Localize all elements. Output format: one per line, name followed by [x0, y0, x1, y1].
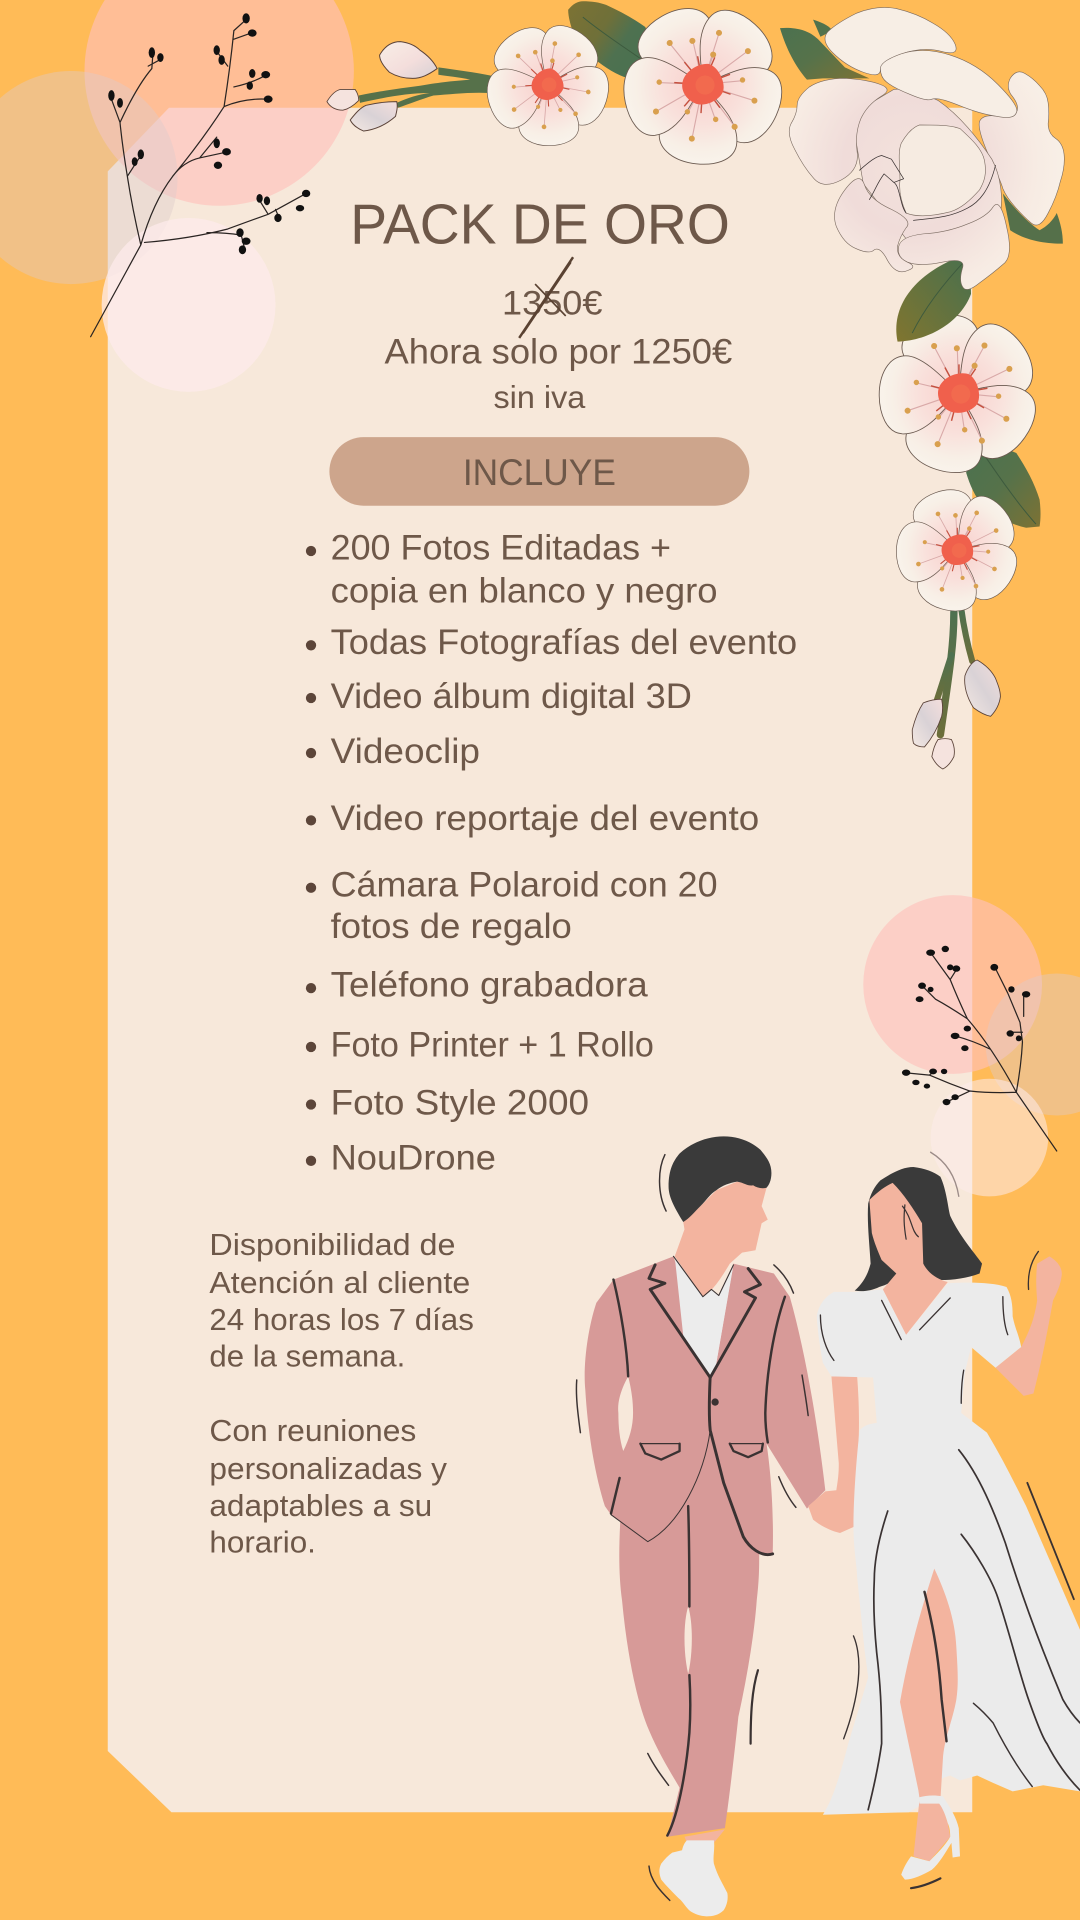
availability text block: de la semana.: [209, 1340, 405, 1374]
woman hair: [855, 1167, 982, 1291]
man jacket: [585, 1256, 825, 1555]
man suit lines: [576, 1155, 808, 1900]
availability text block: personalizadas y: [209, 1452, 448, 1486]
leaf right: [1003, 193, 1063, 244]
decorative circles bottom right: [863, 895, 1080, 1196]
illustration: couple: [576, 1136, 1080, 1916]
availability text block: Atención al cliente: [209, 1266, 470, 1300]
woman left arm and hand: [808, 1376, 859, 1533]
availability text block: horario.: [209, 1526, 316, 1560]
petal lower front: [898, 204, 1009, 289]
flowers and leaves right side: [850, 289, 1070, 769]
man face and neck: [675, 1182, 768, 1297]
petal right: [979, 72, 1064, 225]
item: camara polaroid: fotos de regalo: [331, 906, 572, 946]
item: videoclip: Videoclip: [331, 731, 480, 771]
includes pill heading: INCLUYE: [463, 452, 616, 493]
item: foto style: Foto Style 2000: [331, 1082, 589, 1122]
leaf upper left: [780, 20, 869, 80]
availability text block: adaptables a su: [209, 1489, 432, 1523]
peony flower with leaves: [780, 7, 1064, 342]
woman leg in slit: [900, 1569, 958, 1861]
item: camara polaroid: Cámara Polaroid con 20: [331, 864, 718, 904]
petal top back: [825, 7, 956, 75]
woman face and neck: [869, 1183, 948, 1335]
item: camara polaroid: [306, 864, 718, 946]
includes pill heading: [329, 437, 749, 506]
stems bottom: [937, 609, 972, 735]
bud right lower: [965, 660, 1000, 716]
bud small left: [327, 89, 359, 110]
bud left lower: [912, 699, 943, 747]
pocket gap: [618, 1376, 633, 1451]
man button: [711, 1398, 719, 1406]
flower two: [587, 0, 823, 205]
item: noudrone: NouDrone: [331, 1137, 496, 1177]
peony inner lines: [860, 156, 996, 220]
decorative circles top left: [0, 0, 354, 392]
bud lower: [350, 102, 397, 131]
man shoe: [659, 1840, 728, 1916]
gap between legs: [684, 1607, 692, 1674]
branch: bottom right twig: [902, 946, 1057, 1151]
flower three: [850, 289, 1070, 505]
man trousers: [619, 1420, 759, 1837]
item: 200 fotos: 200 Fotos Editadas +: [331, 528, 671, 568]
availability text block: 24 horas los 7 días: [209, 1303, 474, 1337]
item: video reportaje: Video reportaje del evento: [331, 798, 759, 838]
flower four: [873, 469, 1044, 636]
man shirt: [675, 1256, 733, 1376]
old price struck through: 1350€: [502, 285, 602, 323]
bud large top: [380, 42, 437, 78]
item: 200 fotos: copia en blanco y negro: [331, 570, 718, 610]
man ankle: [684, 1829, 725, 1843]
woman dress lines: [820, 1152, 1080, 1888]
petal center base: [855, 89, 1001, 239]
old price struck through: [502, 257, 602, 338]
stems top: [359, 67, 492, 108]
item: todas fotografias: Todas Fotografías del evento: [331, 622, 797, 662]
item: foto printer: Foto Printer + 1 Rollo: [331, 1025, 654, 1065]
man hair: [669, 1136, 771, 1222]
woman shoe: [901, 1796, 960, 1880]
bud tip: [932, 739, 954, 769]
leaf middle right: [966, 442, 1041, 528]
floral garland top: [327, 0, 823, 205]
item: video album: Video álbum digital 3D: [331, 676, 692, 716]
petal lower left: [835, 179, 913, 272]
flower one: [456, 0, 642, 179]
petal top long: [880, 50, 1017, 118]
item: 200 fotos: [306, 528, 718, 610]
new price: Ahora solo por 1250€: [384, 332, 733, 372]
tax note: sin iva: [493, 379, 586, 415]
leaf bottom: [896, 253, 971, 342]
woman right arm: [996, 1256, 1062, 1396]
petal left: [789, 78, 887, 184]
availability text block: [209, 1228, 474, 1560]
title: PACK DE ORO: [350, 193, 730, 256]
item: telefono: Teléfono grabadora: [331, 965, 648, 1005]
branch: top left twig: [91, 13, 310, 337]
panel: main cream card: [108, 108, 972, 1812]
availability text block: Con reuniones: [209, 1414, 416, 1448]
availability text block: Disponibilidad de: [209, 1228, 456, 1262]
included items list: [306, 528, 797, 1177]
petal inner: [899, 125, 985, 216]
woman dress: [817, 1283, 1080, 1815]
leaf top: [568, 1, 655, 77]
